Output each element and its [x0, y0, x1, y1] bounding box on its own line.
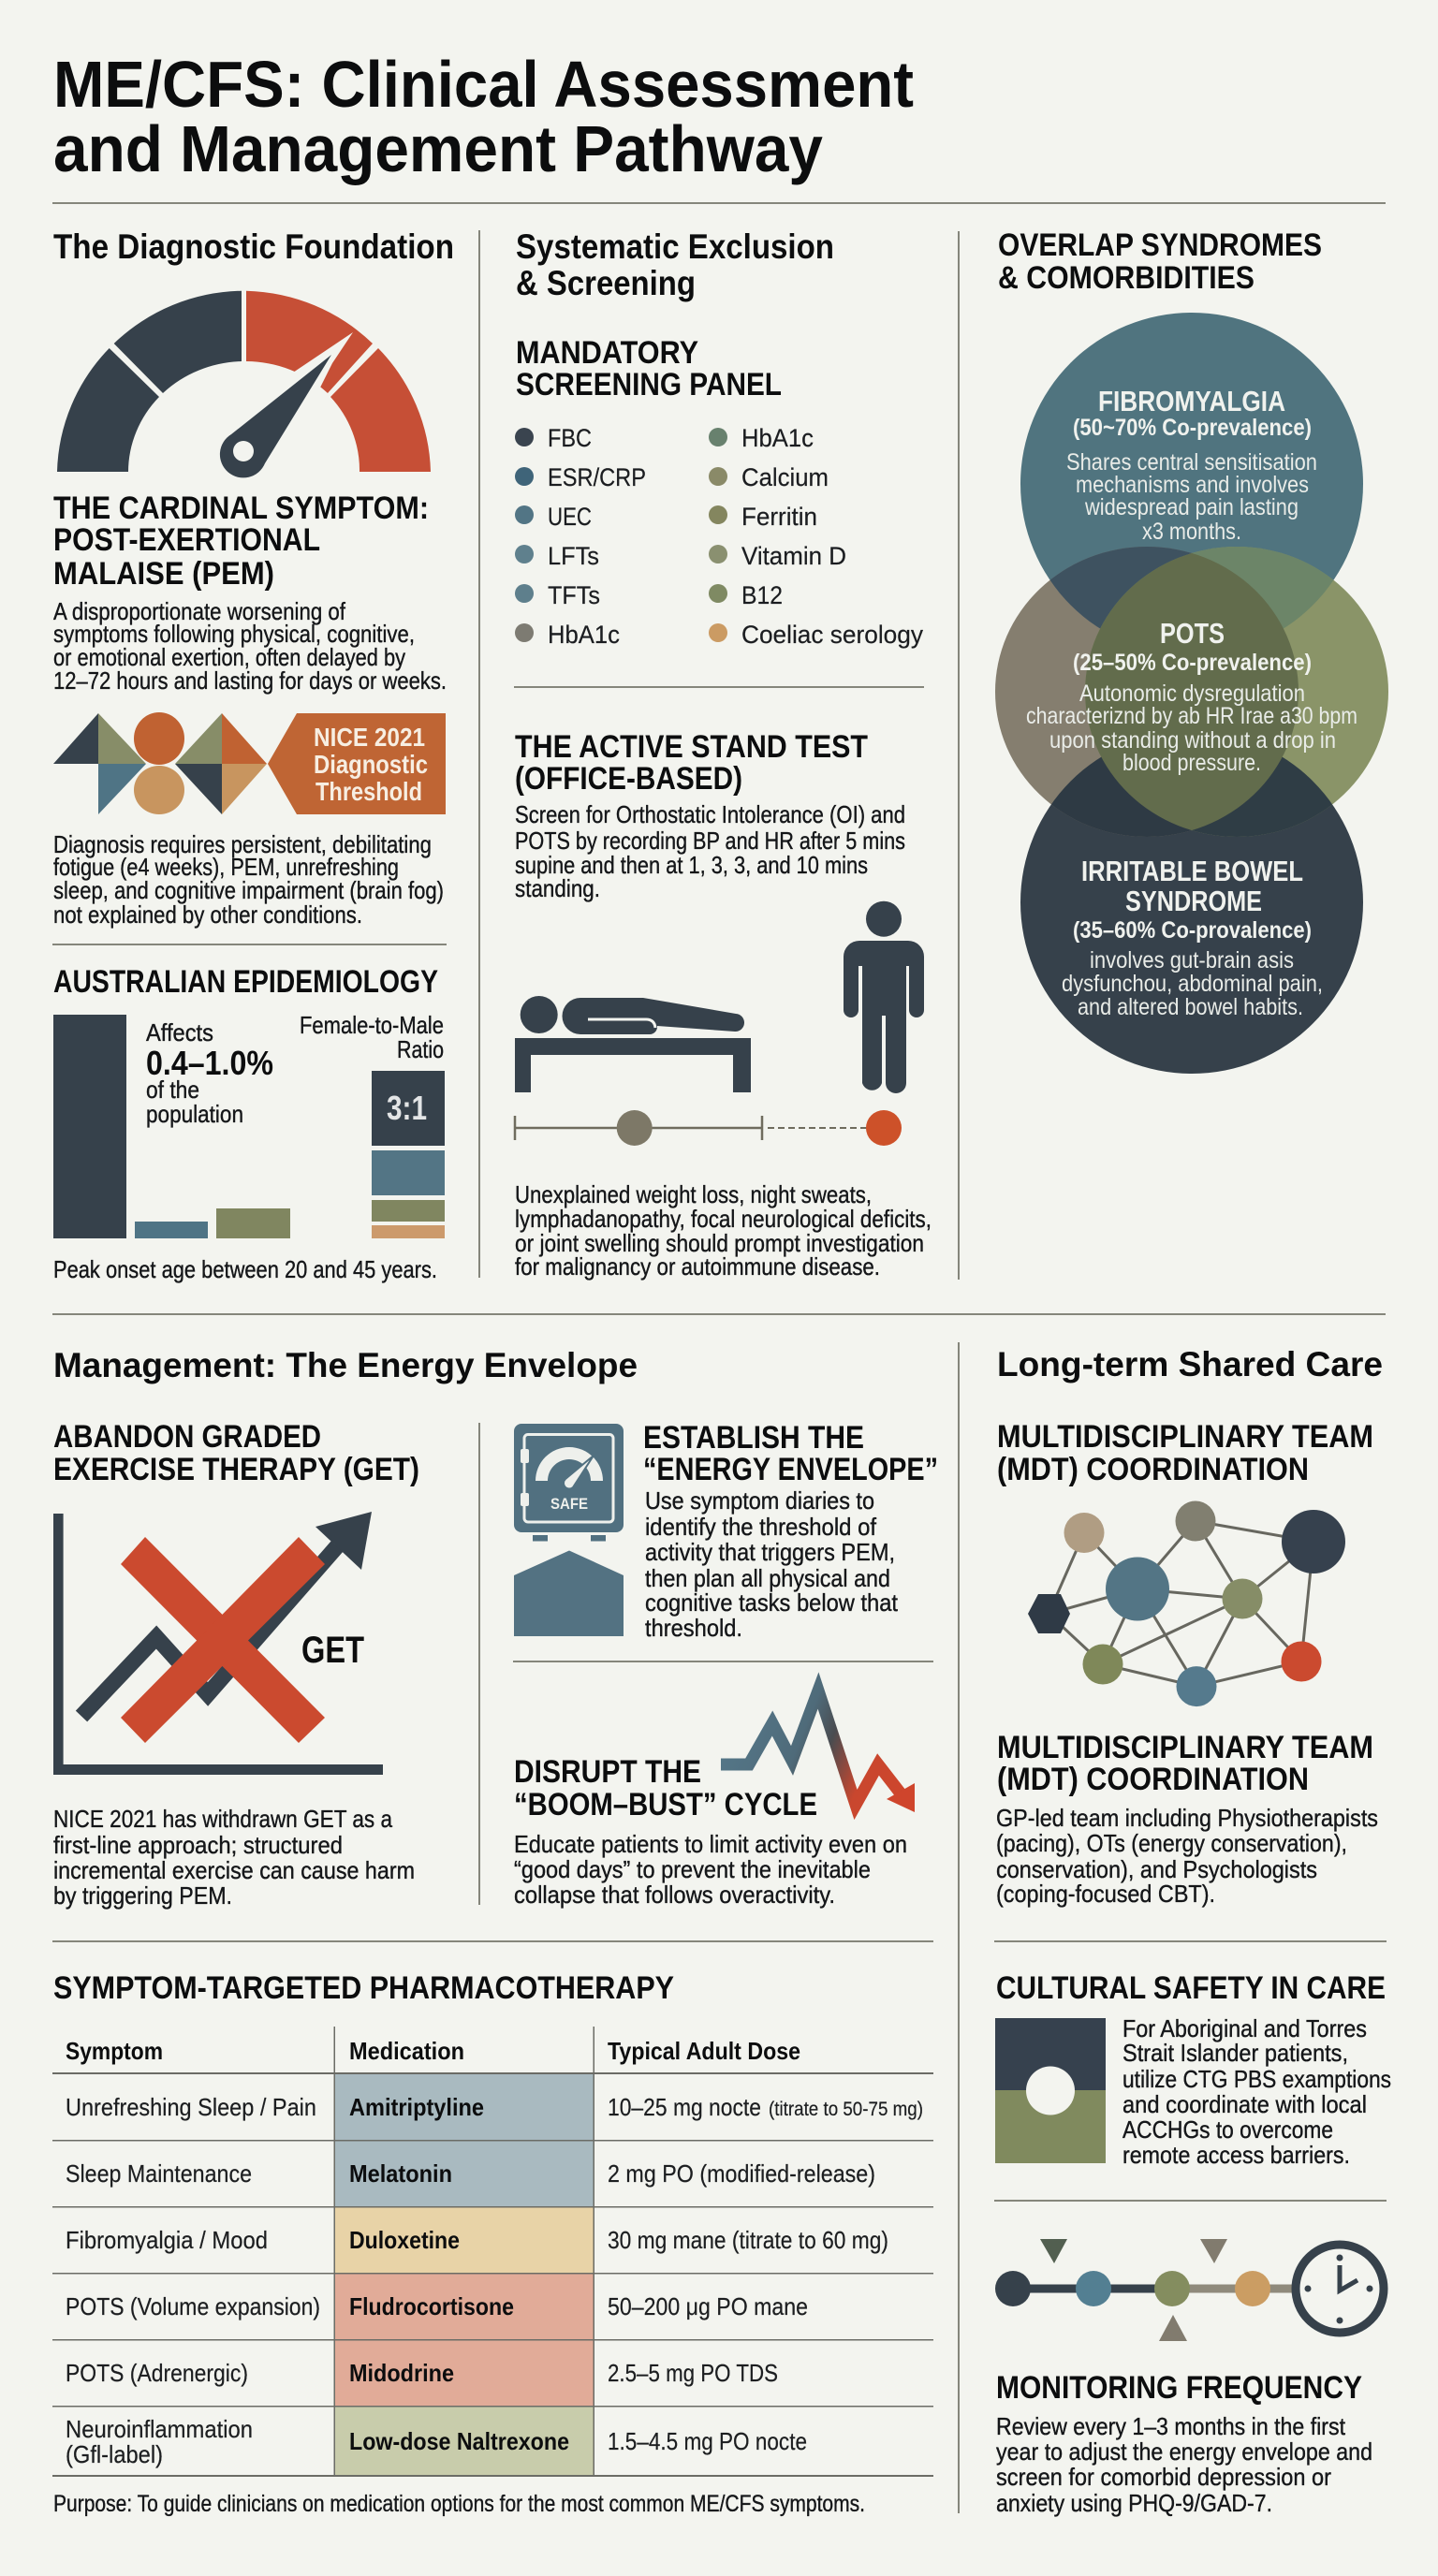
title: and Management Pathway: [53, 112, 823, 185]
table header: Symptom: [66, 2037, 163, 2065]
chart: crossed-out GET arrow: [53, 1512, 383, 1775]
text: energy envelope guidance: then plan all physical and: [645, 1564, 890, 1592]
timeline: supine to standing: [515, 1110, 902, 1146]
text: fibromyalgia: Shares central sensitisation: [1066, 449, 1317, 476]
row: fludrocortisone: [66, 2292, 808, 2320]
text: active stand method: standing.: [515, 874, 600, 902]
callout: prevalence figure: Affects: [146, 1018, 213, 1046]
row: duloxetine: Fibromyalgia / Mood: [66, 2226, 268, 2254]
text: PEM description: 12–72 hours and lasting for days or weeks.: [53, 666, 447, 695]
heading: MDT coordination repeated: MULTIDISCIPLINARY TEAM: [997, 1730, 1373, 1765]
text: irritable bowel syndrome: dysfunchou, abdominal pain,: [1062, 971, 1323, 997]
text: fibromyalgia: [1066, 385, 1317, 545]
text: monitoring guidance: Review every 1–3 months in the first: [996, 2412, 1346, 2440]
panel: the diagnostic foundation: [53, 227, 454, 929]
table header: Typical Adult Dose: [608, 2037, 800, 2065]
heading: management: Management: The Energy Envelope: [53, 1346, 638, 1384]
heading: active stand test: [515, 729, 868, 797]
heading: establish energy envelope: “ENERGY ENVELOPE”: [643, 1452, 938, 1487]
row: midodrine: [66, 2359, 778, 2387]
list: screening tests: Ferritin: [741, 503, 817, 531]
text: irritable bowel syndrome: and altered bowel habits.: [1078, 994, 1303, 1020]
heading: abandon GET: ABANDON GRADED: [53, 1419, 321, 1455]
text: irritable bowel syndrome: IRRITABLE BOWEL: [1081, 855, 1303, 887]
list: screening tests: HbA1c: [741, 424, 814, 452]
row: melatonin: Melatonin: [349, 2159, 452, 2188]
heading: cardinal symptom: POST-EXERTIONAL: [53, 522, 320, 558]
heading: disrupt boom-bust: DISRUPT THE: [514, 1754, 701, 1790]
text: irritable bowel syndrome: (35–60% Co-provalence): [1073, 917, 1312, 944]
icon: clock: [1296, 2245, 1384, 2333]
text: cultural safety guidance: [1123, 2014, 1391, 2169]
row: midodrine: Midodrine: [349, 2359, 454, 2387]
text: boom-bust guidance: [514, 1830, 907, 1909]
callout: prevalence figure: population: [146, 1100, 243, 1128]
text: monitoring guidance: year to adjust the energy envelope and: [996, 2437, 1372, 2466]
table header: [66, 2037, 800, 2065]
heading: MDT coordination: [997, 1419, 1373, 1487]
label: female-to-male ratio: Ratio: [397, 1035, 444, 1063]
text: cultural safety guidance: utilize CTG PBS examptions: [1123, 2065, 1391, 2093]
list: screening tests: TFTs: [548, 581, 600, 609]
heading: active stand test: (OFFICE-BASED): [515, 761, 742, 797]
panel: systematic exclusion and screening: [515, 227, 932, 1281]
chart: overlapping circles: [995, 313, 1388, 1074]
text: red flags: for malignancy or autoimmune disease.: [515, 1252, 880, 1281]
heading: abandon GET: EXERCISE THERAPY (GET): [53, 1452, 419, 1487]
text: MDT description: [996, 1804, 1378, 1908]
text: PEM description: [53, 597, 447, 695]
text: irritable bowel syndrome: SYNDROME: [1125, 885, 1262, 917]
row: melatonin: [66, 2159, 875, 2188]
panel: symptom-targeted pharmacotherapy: [52, 1970, 933, 2517]
label: female-to-male ratio: Female-to-Male: [300, 1011, 444, 1039]
table header: Medication: [349, 2037, 464, 2065]
icon: flag block: [995, 2018, 1106, 2163]
text: energy envelope guidance: activity that triggers PEM,: [645, 1538, 895, 1566]
list: screening tests: [515, 424, 923, 649]
row: fludrocortisone: Fludrocortisone: [349, 2292, 514, 2320]
row: melatonin: Sleep Maintenance: [66, 2159, 252, 2188]
chart: crossed-out GET arrow: GET: [301, 1630, 364, 1671]
text: diagnosis criteria: fotigue (e4 weeks), PEM, unrefreshing: [53, 853, 399, 881]
banner: NICE 2021 diagnostic threshold: NICE 2021: [314, 723, 425, 752]
list: screening tests: LFTs: [548, 542, 599, 570]
text: POTS: POTS: [1160, 617, 1225, 650]
text: red flags: or joint swelling should prompt investigation: [515, 1229, 924, 1257]
text: diagnosis criteria: sleep, and cognitive impairment (brain fog): [53, 876, 444, 904]
row: duloxetine: [66, 2226, 888, 2254]
row: low-dose naltrexone: [66, 2415, 807, 2468]
heading: cardinal symptom: [53, 490, 429, 592]
text: fibromyalgia: widespread pain lasting: [1084, 494, 1299, 520]
row: fludrocortisone: 50–200 μg PO mane: [608, 2292, 808, 2320]
heading: cardinal symptom: THE CARDINAL SYMPTOM:: [53, 490, 429, 526]
row: amitriptyline: Unrefreshing Sleep / Pain: [66, 2093, 316, 2121]
text: active stand method: [515, 800, 905, 902]
list: screening tests: FBC: [548, 424, 592, 452]
text: MDT description: conservation), and Psychologists: [996, 1855, 1317, 1883]
text: monitoring guidance: screen for comorbid depression or: [996, 2463, 1331, 2491]
text: irritable bowel syndrome: involves gut-brain asis: [1090, 947, 1294, 973]
heading: abandon GET: [53, 1419, 419, 1487]
heading: overlap syndromes: & COMORBIDITIES: [998, 260, 1255, 296]
heading: overlap syndromes: OVERLAP SYNDROMES: [998, 227, 1322, 263]
heading: MDT coordination repeated: (MDT) COORDINATION: [997, 1762, 1309, 1797]
label: female-to-male ratio: [300, 1011, 444, 1063]
heading: MDT coordination repeated: [997, 1730, 1373, 1797]
text: NICE withdrawn GET: first-line approach; structured: [53, 1831, 343, 1859]
panel: overlap syndromes and comorbidities: [995, 227, 1388, 1074]
text: POTS: blood pressure.: [1123, 750, 1261, 776]
icon: safe with gauge and envelope: SAFE: [550, 1495, 588, 1513]
heading: cardinal symptom: MALAISE (PEM): [53, 556, 274, 592]
row: midodrine: 2.5–5 mg PO TDS: [608, 2359, 778, 2387]
text: energy envelope guidance: threshold.: [645, 1614, 742, 1642]
row: duloxetine: Duloxetine: [349, 2226, 460, 2254]
text: POTS: Autonomic dysregulation: [1079, 681, 1305, 707]
list: screening tests: ESR/CRP: [548, 463, 646, 491]
heading: MDT coordination: (MDT) COORDINATION: [997, 1452, 1309, 1487]
text: MDT description: (pacing), OTs (energy conservation),: [996, 1829, 1347, 1857]
caption: purpose: Purpose: To guide clinicians on medication options for the most common ME/CFS symptoms.: [53, 2491, 865, 2517]
text: cultural safety guidance: and coordinate with local: [1123, 2090, 1367, 2118]
heading: establish energy envelope: [643, 1420, 938, 1487]
stacked bar: 3:1 ratio: 3:1: [387, 1089, 427, 1127]
heading: mandatory screening panel: [516, 335, 782, 402]
banner: NICE 2021 diagnostic threshold: Diagnostic: [314, 750, 428, 779]
panel: long-term shared care: [995, 1345, 1391, 2517]
heading: mandatory screening panel: SCREENING PANEL: [516, 367, 782, 402]
text: NICE withdrawn GET: by triggering PEM.: [53, 1881, 232, 1910]
row: low-dose naltrexone: 1.5–4.5 mg PO nocte: [608, 2427, 807, 2455]
list: screening tests: Calcium: [741, 463, 829, 491]
panel: management the energy envelope: [53, 1346, 938, 1910]
callout: prevalence figure: of the: [146, 1076, 199, 1104]
heading: pharmacotherapy: SYMPTOM-TARGETED PHARMACOTHERAPY: [53, 1970, 674, 2006]
icon: standing person: [844, 901, 924, 1093]
row: fludrocortisone: POTS (Volume expansion): [66, 2292, 320, 2320]
text: boom-bust guidance: Educate patients to limit activity even on: [514, 1830, 907, 1858]
text: MDT description: GP-led team including Physiotherapists: [996, 1804, 1378, 1832]
row: amitriptyline: [66, 2093, 923, 2121]
text: fibromyalgia: (50~70% Co-prevalence): [1073, 415, 1312, 441]
icon: safe with gauge and envelope: [514, 1424, 624, 1636]
banner: NICE 2021 diagnostic threshold: Threshold: [315, 777, 422, 806]
chart: boom-bust line with arrow: [721, 1690, 915, 1812]
row: midodrine: POTS (Adrenergic): [66, 2359, 248, 2387]
text: POTS: upon standing without a drop in: [1049, 727, 1336, 754]
text: active stand method: supine and then at 1, 3, 3, and 10 mins: [515, 851, 868, 879]
title: ME/CFS: Clinical Assessment: [53, 48, 914, 121]
text: energy envelope guidance: cognitive tasks below that: [645, 1588, 899, 1617]
row: melatonin: 2 mg PO (modified-release): [608, 2159, 875, 2188]
text: NICE withdrawn GET: NICE 2021 has withdrawn GET as a: [53, 1805, 392, 1833]
text: monitoring guidance: [996, 2412, 1372, 2517]
text: red flags: lymphadanopathy, focal neurological deficits,: [515, 1205, 932, 1233]
text: cultural safety guidance: ACCHGs to overcome: [1123, 2115, 1333, 2144]
text: red flags: Unexplained weight loss, night sweats,: [515, 1180, 872, 1208]
text: energy envelope guidance: [645, 1486, 899, 1642]
row: amitriptyline: (titrate to 50-75 mg): [769, 2099, 923, 2120]
text: POTS: characteriznd by ab HR Irae a30 bpm: [1026, 703, 1357, 729]
text: diagnosis criteria: not explained by other conditions.: [53, 900, 362, 929]
text: boom-bust guidance: collapse that follows overactivity.: [514, 1881, 835, 1909]
table: medications: [52, 2027, 933, 2477]
text: fibromyalgia: mechanisms and involves: [1076, 472, 1309, 498]
text: cultural safety guidance: For Aboriginal and Torres: [1123, 2014, 1367, 2042]
heading: systematic exclusion: & Screening: [516, 264, 696, 302]
text: monitoring guidance: anxiety using PHQ-9/GAD-7.: [996, 2489, 1272, 2517]
heading: disrupt boom-bust: “BOOM–BUST” CYCLE: [514, 1787, 817, 1822]
callout: prevalence figure: [146, 1018, 273, 1128]
heading: establish energy envelope: ESTABLISH THE: [643, 1420, 864, 1456]
text: diagnosis criteria: [53, 830, 444, 929]
heading: cultural safety: CULTURAL SAFETY IN CARE: [996, 1970, 1386, 2006]
row: low-dose naltrexone: (Gfl-label): [66, 2440, 163, 2468]
heading: mandatory screening panel: MANDATORY: [516, 335, 698, 371]
heading: long-term shared care: Long-term Shared Care: [997, 1345, 1383, 1383]
text: diagnosis criteria: Diagnosis requires persistent, debilitating: [53, 830, 432, 858]
text: peak onset: Peak onset age between 20 and 45 years.: [53, 1255, 437, 1283]
text: POTS: (25–50% Co-prevalence): [1073, 650, 1312, 676]
list: screening tests: UEC: [548, 503, 592, 531]
row: low-dose naltrexone: Low-dose Naltrexone: [349, 2427, 569, 2455]
text: boom-bust guidance: “good days” to prevent the inevitable: [514, 1855, 871, 1883]
title: [53, 48, 914, 185]
heading: australian epidemiology: AUSTRALIAN EPIDEMIOLOGY: [53, 964, 438, 1000]
callout: prevalence figure: 0.4–1.0%: [146, 1044, 273, 1082]
list: screening tests: Coeliac serology: [741, 621, 923, 649]
heading: MDT coordination: MULTIDISCIPLINARY TEAM: [997, 1419, 1373, 1455]
heading: disrupt boom-bust: [514, 1754, 817, 1822]
text: NICE withdrawn GET: incremental exercise can cause harm: [53, 1856, 415, 1884]
icon: geometric pattern: [53, 712, 267, 814]
row: amitriptyline: Amitriptyline: [349, 2093, 484, 2121]
text: fibromyalgia: FIBROMYALGIA: [1098, 385, 1285, 417]
text: PEM description: symptoms following physical, cognitive,: [53, 620, 415, 648]
row: amitriptyline: 10–25 mg nocte: [608, 2093, 761, 2121]
list: screening tests: B12: [741, 581, 783, 609]
diagram: team network: [1028, 1501, 1345, 1706]
text: POTS: [1026, 617, 1357, 776]
bar chart: prevalence: [53, 1015, 290, 1238]
heading: systematic exclusion: Systematic Exclusion: [516, 227, 834, 266]
text: irritable bowel syndrome: [1062, 855, 1323, 1020]
text: MDT description: (coping-focused CBT).: [996, 1880, 1215, 1908]
row: low-dose naltrexone: Neuroinflammation: [66, 2415, 253, 2443]
list: screening tests: HbA1c: [548, 621, 620, 649]
heading: diagnostic foundation: The Diagnostic Foundation: [53, 227, 454, 266]
text: active stand method: Screen for Orthostatic Intolerance (OI) and: [515, 800, 905, 828]
text: PEM description: or emotional exertion, often delayed by: [53, 643, 405, 671]
panel: australian epidemiology: [53, 964, 445, 1283]
timeline: monitoring with clock: [995, 2239, 1384, 2341]
text: cultural safety guidance: Strait Islander patients,: [1123, 2039, 1348, 2067]
stacked bar: 3:1 ratio: [372, 1071, 445, 1238]
text: cultural safety guidance: remote access barriers.: [1123, 2141, 1350, 2169]
text: NICE withdrawn GET: [53, 1805, 415, 1910]
text: energy envelope guidance: Use symptom diaries to: [645, 1486, 874, 1515]
list: screening tests: Vitamin D: [741, 542, 846, 570]
text: red flags: [515, 1180, 932, 1281]
text: fibromyalgia: x3 months.: [1142, 519, 1241, 545]
heading: monitoring frequency: MONITORING FREQUENCY: [996, 2370, 1362, 2406]
icon: severity gauge: [57, 291, 431, 477]
heading: systematic exclusion: [516, 227, 834, 302]
text: energy envelope guidance: identify the threshold of: [645, 1513, 877, 1541]
row: duloxetine: 30 mg mane (titrate to 60 mg): [608, 2226, 888, 2254]
banner: NICE 2021 diagnostic threshold: [268, 713, 446, 814]
text: active stand method: POTS by recording BP and HR after 5 mins: [515, 827, 905, 855]
heading: overlap syndromes: [998, 227, 1322, 296]
heading: active stand test: THE ACTIVE STAND TEST: [515, 729, 868, 765]
icon: patient lying on bed: [515, 996, 751, 1092]
text: PEM description: A disproportionate worsening of: [53, 597, 346, 625]
